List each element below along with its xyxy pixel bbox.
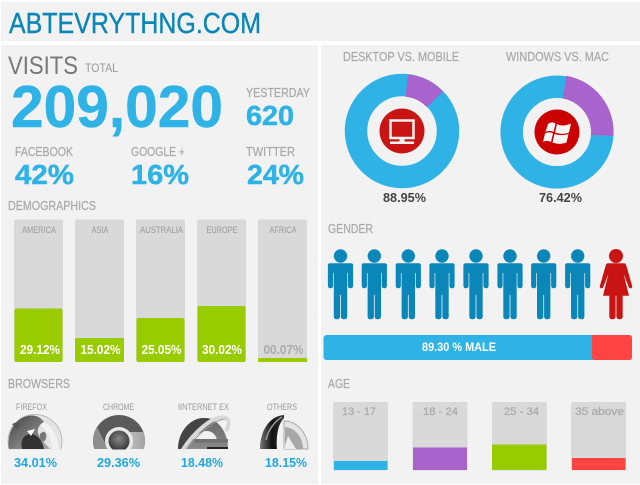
desktop percent: 88.95% bbox=[383, 191, 426, 205]
bar: age 13-17: 13 - 17 bbox=[342, 406, 376, 418]
donut chart: desktop vs mobile bbox=[356, 74, 448, 177]
bar: europe: EUROPE bbox=[206, 225, 238, 235]
gender ratio bar: 89.30 % MALE bbox=[422, 340, 496, 354]
bar: age 35 above bbox=[571, 402, 626, 470]
age heading: AGE bbox=[328, 376, 350, 391]
browser: firefox: FIREFOX bbox=[16, 402, 47, 412]
bar: age 25-34: 25 - 34 bbox=[504, 406, 539, 418]
yesterday label: YESTERDAY bbox=[246, 86, 311, 100]
bar: australia bbox=[136, 220, 185, 362]
bar: age 25-34 bbox=[492, 402, 547, 470]
browsers heading: BROWSERS bbox=[8, 376, 70, 391]
google plus stat: 16% bbox=[131, 159, 189, 190]
bar: africa: AFRICA bbox=[270, 225, 296, 235]
bar: age 35 above: 35 above bbox=[575, 406, 624, 418]
desktop vs mobile heading: DESKTOP VS. MOBILE bbox=[343, 49, 459, 64]
demographics heading: DEMOGRAPHICS bbox=[8, 198, 96, 213]
bar: asia bbox=[75, 220, 124, 362]
bar: europe: 30.02% bbox=[202, 343, 242, 357]
browser: chrome: 29.36% bbox=[97, 456, 140, 470]
bar: africa bbox=[258, 220, 307, 362]
icon: desktop monitor bbox=[380, 108, 424, 154]
browser: others: 18.15% bbox=[265, 456, 307, 470]
bar: age 18-24 bbox=[412, 402, 468, 470]
icon: windows logo bbox=[534, 110, 580, 154]
bar: australia: 25.05% bbox=[142, 343, 182, 357]
browser: chrome: CHROME bbox=[103, 402, 134, 412]
twitter stat bbox=[246, 145, 304, 190]
bar: america: 29.12% bbox=[20, 343, 60, 357]
browser: others bbox=[260, 402, 308, 470]
panel: devices, gender and age bbox=[321, 45, 640, 484]
donut chart: windows vs mac bbox=[512, 76, 614, 177]
browser: internet explorer: IINTERNET EX bbox=[178, 402, 229, 412]
yesterday value: 620 bbox=[246, 100, 294, 131]
bar: africa: 00.07% bbox=[264, 343, 304, 357]
bar: america: AMERICA bbox=[22, 225, 56, 235]
facebook stat: FACEBOOK bbox=[15, 145, 74, 159]
total visits number: 209,020 bbox=[11, 74, 223, 140]
google plus stat bbox=[131, 145, 189, 190]
twitter stat: 24% bbox=[247, 159, 304, 190]
bar: age 18-24: 18 - 24 bbox=[423, 406, 458, 418]
panel: visits, demographics and browsers bbox=[1, 45, 318, 484]
browser: chrome bbox=[93, 404, 145, 467]
header panel bbox=[1, 2, 640, 41]
facebook stat bbox=[15, 145, 74, 190]
title: ABTEVRYTHNG.COM bbox=[9, 8, 261, 40]
browser: others: OTHERS bbox=[267, 402, 297, 412]
pictogram: female figure bbox=[600, 249, 632, 319]
icon: firefox bbox=[8, 414, 62, 450]
windows vs mac heading: WINDOWS VS. MAC bbox=[506, 49, 609, 64]
visits heading: VISITS bbox=[8, 52, 78, 80]
gender ratio bar bbox=[324, 335, 632, 360]
google plus stat: GOOGLE + bbox=[131, 145, 185, 159]
bar: asia: ASIA bbox=[92, 225, 108, 235]
icon: safari and opera style bbox=[260, 415, 308, 449]
gender heading: GENDER bbox=[328, 222, 373, 236]
windows percent: 76.42% bbox=[539, 191, 582, 205]
browser: internet explorer: 18.48% bbox=[181, 456, 223, 470]
browser: internet explorer bbox=[178, 402, 229, 470]
bar: age 13-17 bbox=[333, 402, 388, 470]
total label: TOTAL bbox=[85, 61, 118, 75]
browser: firefox: 34.01% bbox=[14, 456, 57, 470]
bar: europe bbox=[197, 220, 246, 362]
icon: chrome bbox=[93, 415, 145, 450]
bar: america bbox=[14, 220, 63, 362]
bar: australia: AUSTRALIA bbox=[140, 225, 183, 235]
icon: internet explorer bbox=[178, 417, 229, 451]
pictogram: male figures bbox=[328, 249, 590, 319]
facebook stat: 42% bbox=[15, 159, 74, 190]
browser: firefox bbox=[8, 402, 62, 470]
twitter stat: TWITTER bbox=[246, 145, 295, 159]
bar: asia: 15.02% bbox=[80, 343, 120, 357]
